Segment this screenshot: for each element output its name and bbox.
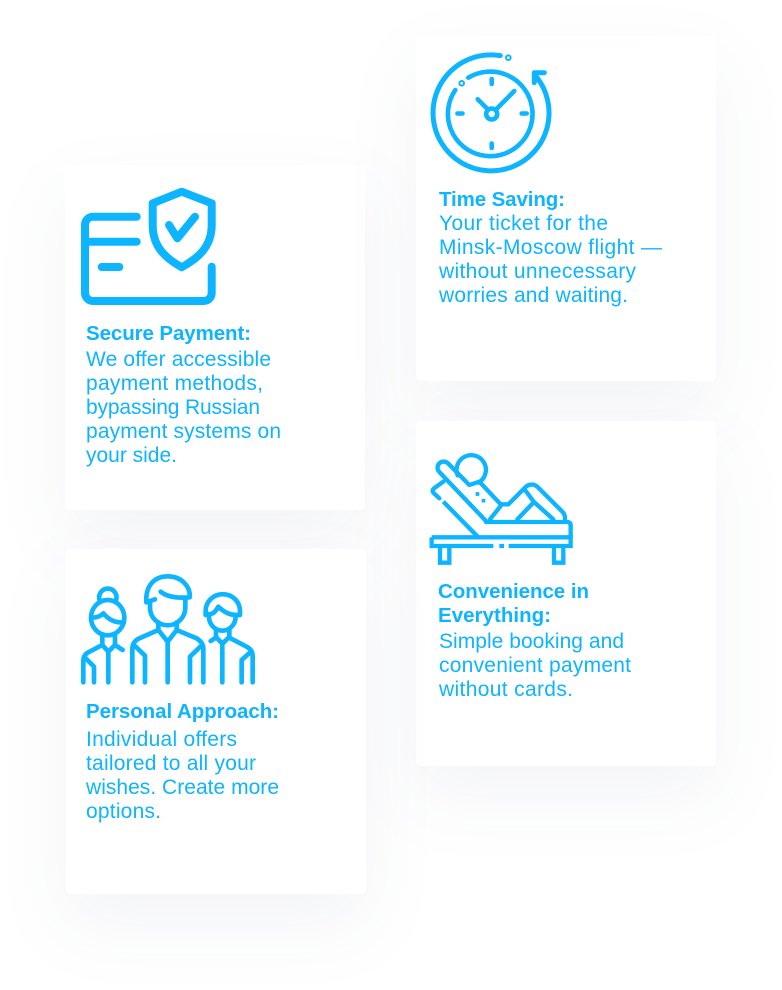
icon: person reclining on bed <box>432 455 571 563</box>
body text: personal approach: tailored to all your <box>86 752 256 775</box>
body text: secure payment: payment systems on <box>86 420 281 443</box>
body text: time saving <box>438 212 662 307</box>
body text: secure payment <box>86 348 281 467</box>
heading: convenience: Everything: <box>438 604 551 627</box>
body text: secure payment: bypassing Russian <box>86 396 260 419</box>
icon: three people <box>83 576 253 682</box>
heading: convenience <box>438 580 589 627</box>
body text: secure payment: payment methods, <box>86 372 263 395</box>
panel: convenience <box>416 421 716 766</box>
heading: personal approach: Personal Approach: <box>86 700 279 723</box>
panel: personal approach <box>66 549 366 894</box>
body text: convenience: convenient payment <box>439 654 631 677</box>
heading: convenience: Convenience in <box>438 580 589 603</box>
heading: time saving: Time Saving: <box>439 188 565 211</box>
body text: personal approach <box>85 728 279 823</box>
panel: time saving <box>416 36 716 381</box>
body text: personal approach: Individual offers <box>86 728 237 751</box>
card background <box>66 549 366 894</box>
body text: secure payment: We offer accessible <box>86 348 271 371</box>
card background <box>65 165 365 510</box>
body text: time saving: Your ticket for the <box>439 212 608 235</box>
body text: convenience: Simple booking and <box>439 630 624 653</box>
body text: personal approach: options. <box>86 800 161 823</box>
body text: personal approach: wishes. Create more <box>85 776 279 799</box>
body text: time saving: worries and waiting. <box>438 284 628 307</box>
card background <box>416 421 716 766</box>
card background <box>416 36 716 381</box>
body text: time saving: Minsk-Moscow flight — <box>439 236 662 259</box>
icon: card with shield <box>85 192 212 301</box>
heading: secure payment: Secure Payment: <box>86 322 251 345</box>
icon: clock with arrow <box>433 55 549 171</box>
body text: convenience <box>438 630 631 701</box>
panel: secure payment <box>65 165 365 510</box>
body text: secure payment: your side. <box>86 444 177 467</box>
body text: convenience: without cards. <box>438 678 573 701</box>
body text: time saving: without unnecessary <box>438 260 636 283</box>
